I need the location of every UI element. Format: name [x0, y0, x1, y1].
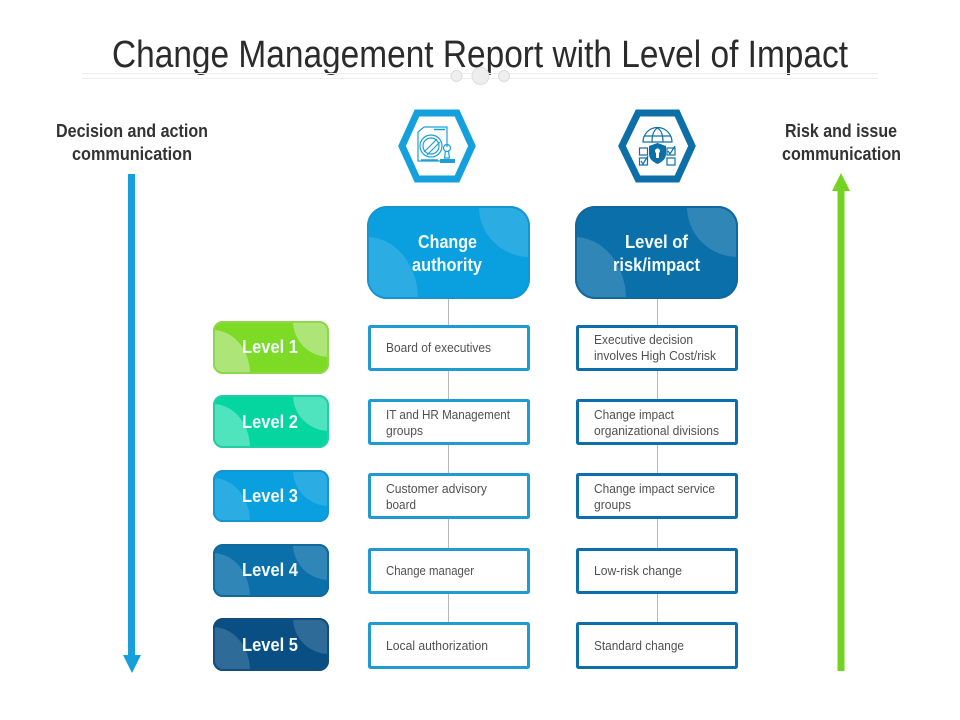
level 3 badge	[213, 470, 329, 522]
box: local authorization: Local authorization	[386, 638, 488, 653]
header: change authority: authority	[412, 254, 483, 275]
title: Change Management Report with Level of Impact	[112, 34, 848, 76]
left heading: decision and action communication: Decision and action	[56, 121, 208, 141]
level 3 badge: Level 3	[242, 485, 298, 506]
level 1 badge	[213, 321, 329, 374]
box: board of executives: Board of executives	[386, 340, 491, 355]
connector lines	[448, 299, 658, 622]
box: change impact service groups: Change impact service	[594, 481, 715, 496]
level 4 badge	[213, 544, 329, 597]
box: local authorization	[370, 624, 528, 668]
box: low-risk change	[578, 550, 736, 592]
right heading: risk and issue communication	[782, 121, 901, 164]
arrow: downward blue	[123, 174, 141, 673]
box: customer advisory board: Customer advisory	[386, 481, 487, 496]
right heading: risk and issue communication: Risk and issue	[785, 121, 897, 141]
box: change impact service groups	[578, 474, 736, 518]
box: board of executives	[370, 326, 528, 370]
box: executive decision: involves High Cost/risk	[594, 348, 716, 363]
box: executive decision: Executive decision	[594, 332, 693, 347]
box: change impact organizational divisions: organizational divisions	[594, 423, 719, 438]
arrow: upward green	[832, 173, 850, 671]
header: level of risk/impact	[575, 206, 738, 299]
left heading: decision and action communication: communication	[72, 144, 192, 164]
level 5 badge: Level 5	[242, 634, 298, 655]
box: IT and HR management groups: IT and HR Management	[386, 407, 510, 422]
box: change impact organizational divisions: Change impact	[594, 407, 674, 422]
box: change manager: Change manager	[386, 563, 475, 578]
box: change impact service groups: groups	[594, 497, 631, 512]
left heading: decision and action communication	[56, 121, 208, 164]
header: change authority: Change	[418, 231, 477, 252]
level 1 badge: Level 1	[242, 336, 298, 357]
icon: document with stamp in hexagon	[402, 113, 472, 179]
level 4 badge: Level 4	[242, 559, 299, 580]
box: standard change	[578, 624, 736, 668]
box: executive decision	[578, 326, 736, 370]
header: level of risk/impact: Level of	[625, 231, 689, 252]
box: customer advisory board: board	[386, 497, 416, 512]
box: low-risk change: Low-risk change	[594, 563, 682, 578]
header: level of risk/impact: risk/impact	[613, 254, 700, 275]
right heading: risk and issue communication: communication	[782, 144, 901, 164]
level 2 badge: Level 2	[242, 411, 298, 432]
level 5 badge	[213, 618, 329, 671]
title ornament divider	[82, 68, 878, 84]
box: standard change: Standard change	[594, 638, 684, 653]
header: change authority	[367, 206, 530, 299]
level 2 badge	[213, 395, 329, 448]
box: IT and HR management groups: groups	[386, 423, 423, 438]
box: change manager	[370, 550, 528, 592]
box: change impact organizational divisions	[578, 400, 736, 444]
box: IT and HR management groups	[370, 400, 528, 444]
box: customer advisory board	[370, 474, 528, 518]
icon: globe shield and checklist in hexagon	[622, 113, 692, 179]
